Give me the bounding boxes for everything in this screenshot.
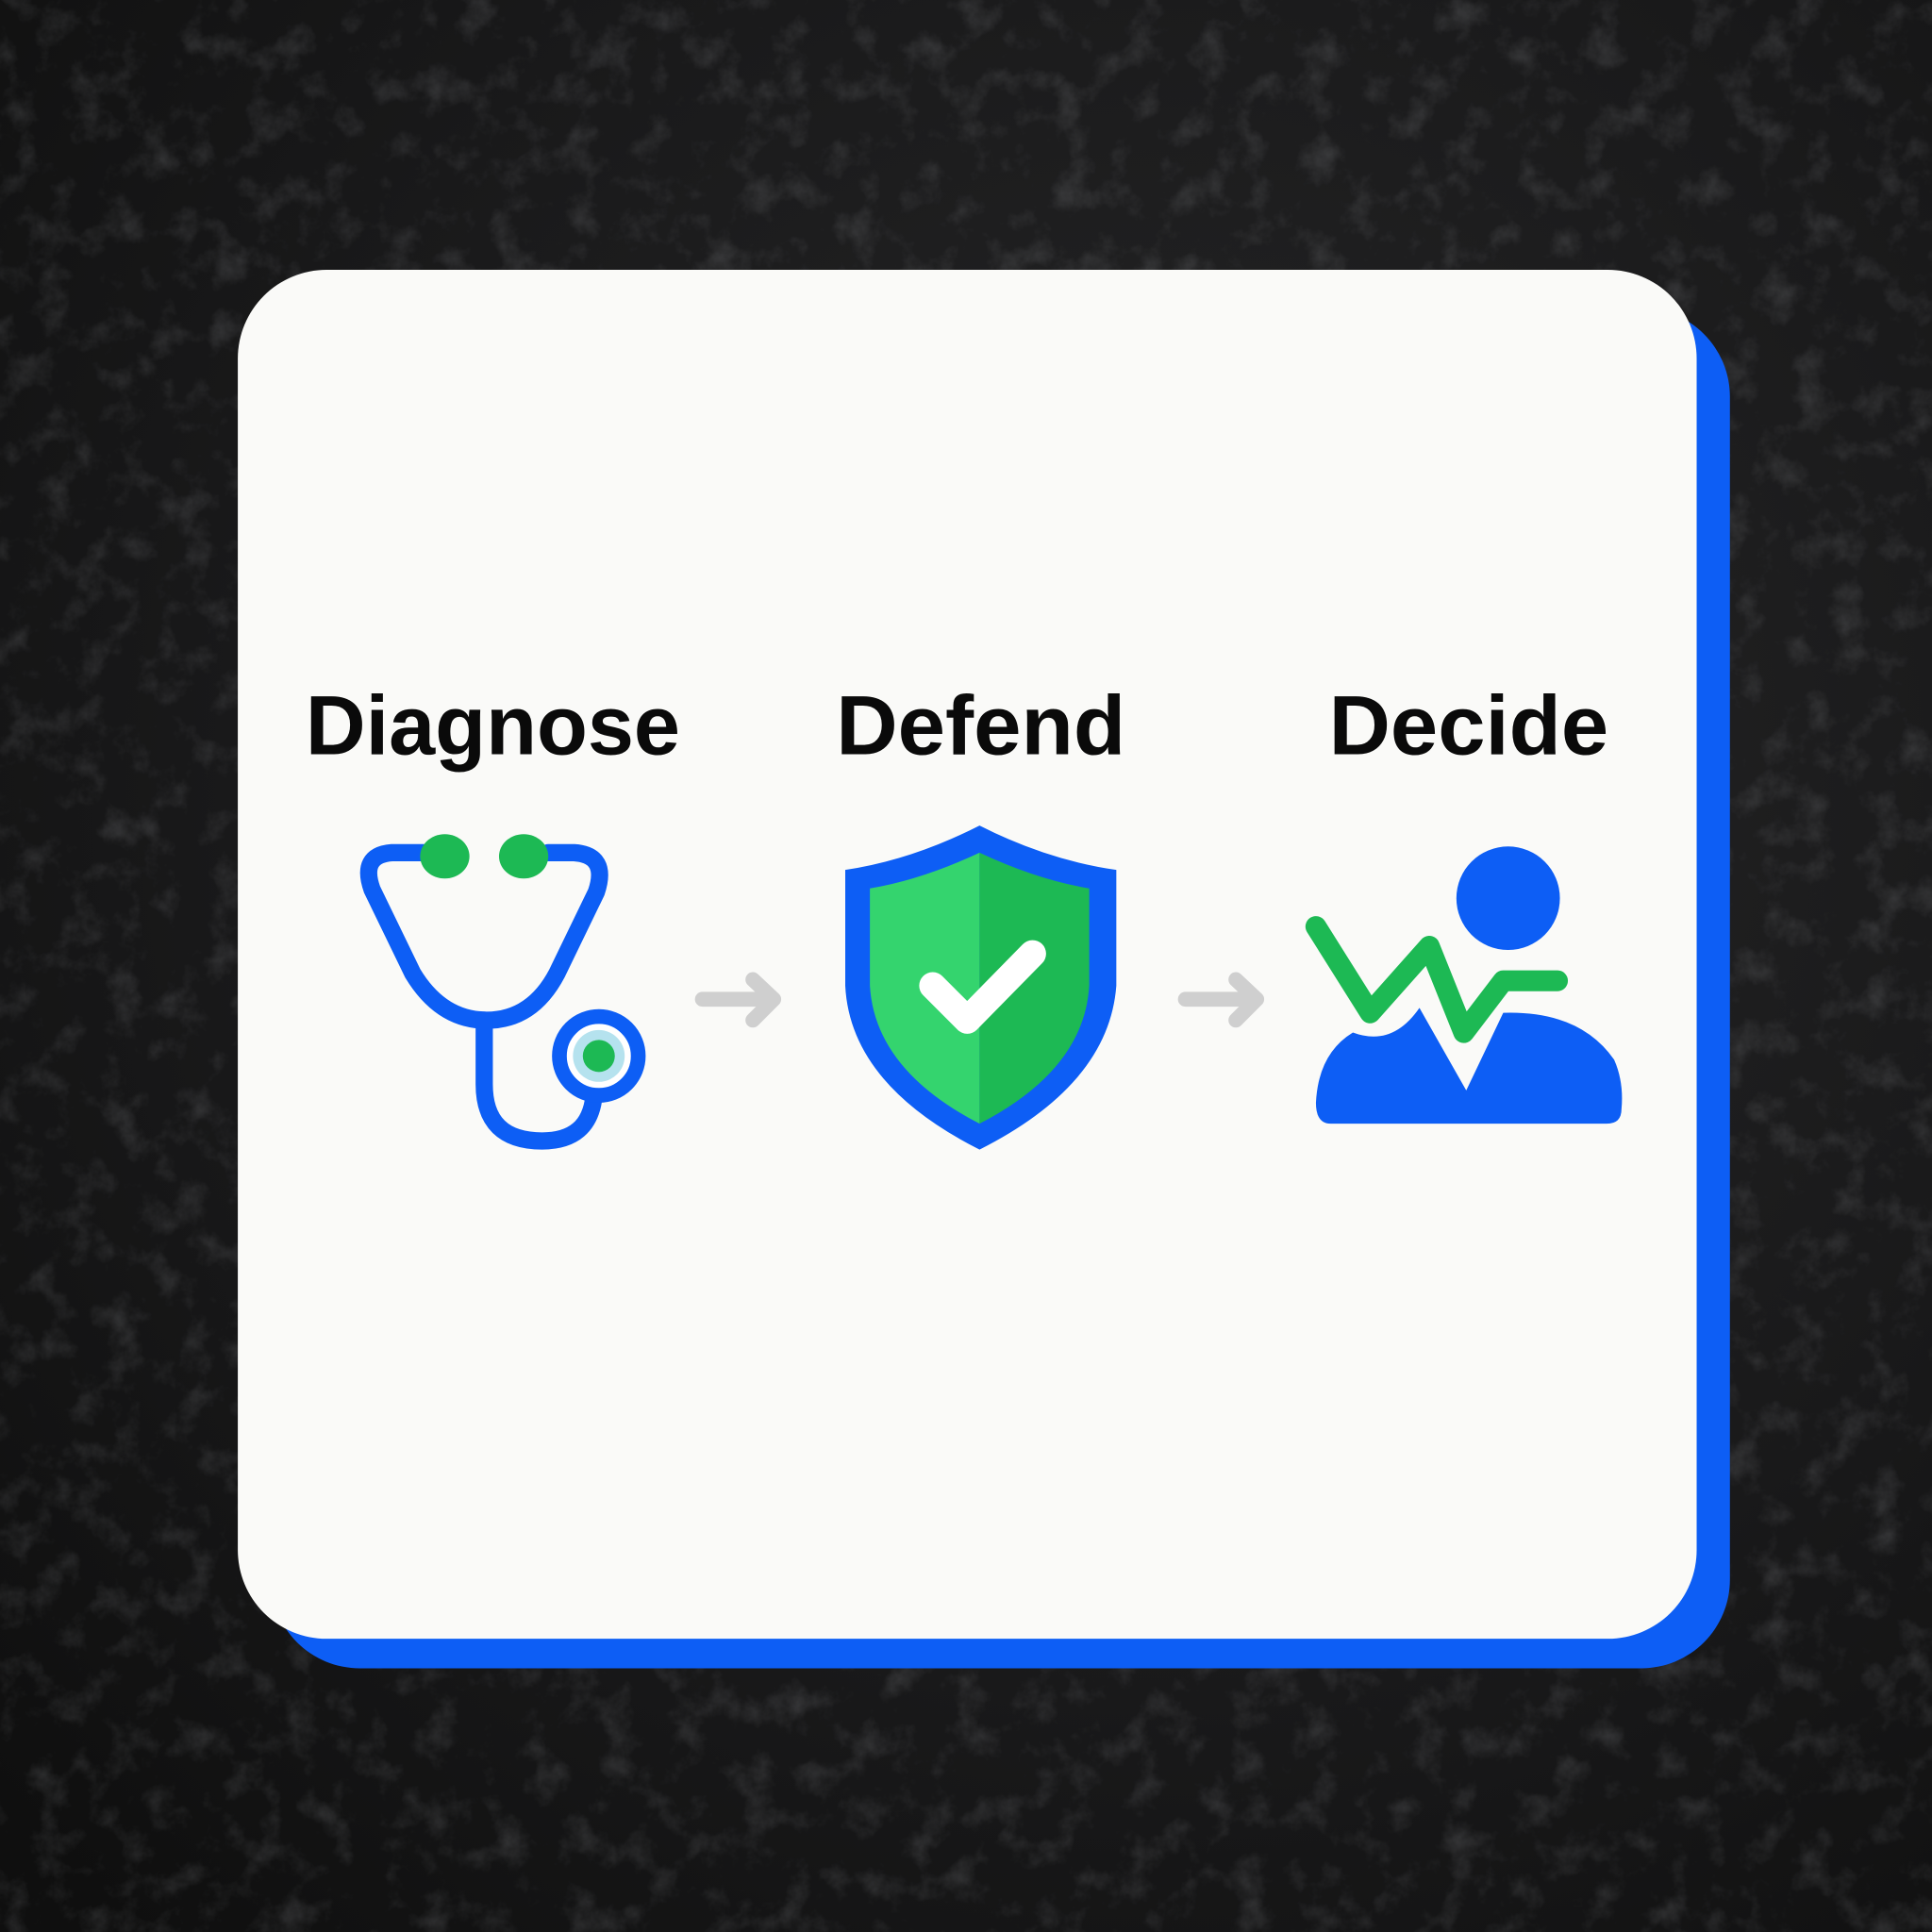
arrow 2 (1185, 979, 1257, 1020)
heading: Decide: Decide (1329, 678, 1608, 772)
heading: Diagnose: Diagnose (306, 678, 680, 772)
icon: shield with check (845, 825, 1116, 1150)
heading: Defend: Defend (836, 678, 1125, 772)
card: main panel (238, 270, 1697, 1639)
arrow 1 (702, 979, 774, 1020)
icon: stethoscope (369, 834, 639, 1141)
icon: person with trend line (1316, 846, 1622, 1124)
card shadow: blue offset (271, 308, 1730, 1668)
